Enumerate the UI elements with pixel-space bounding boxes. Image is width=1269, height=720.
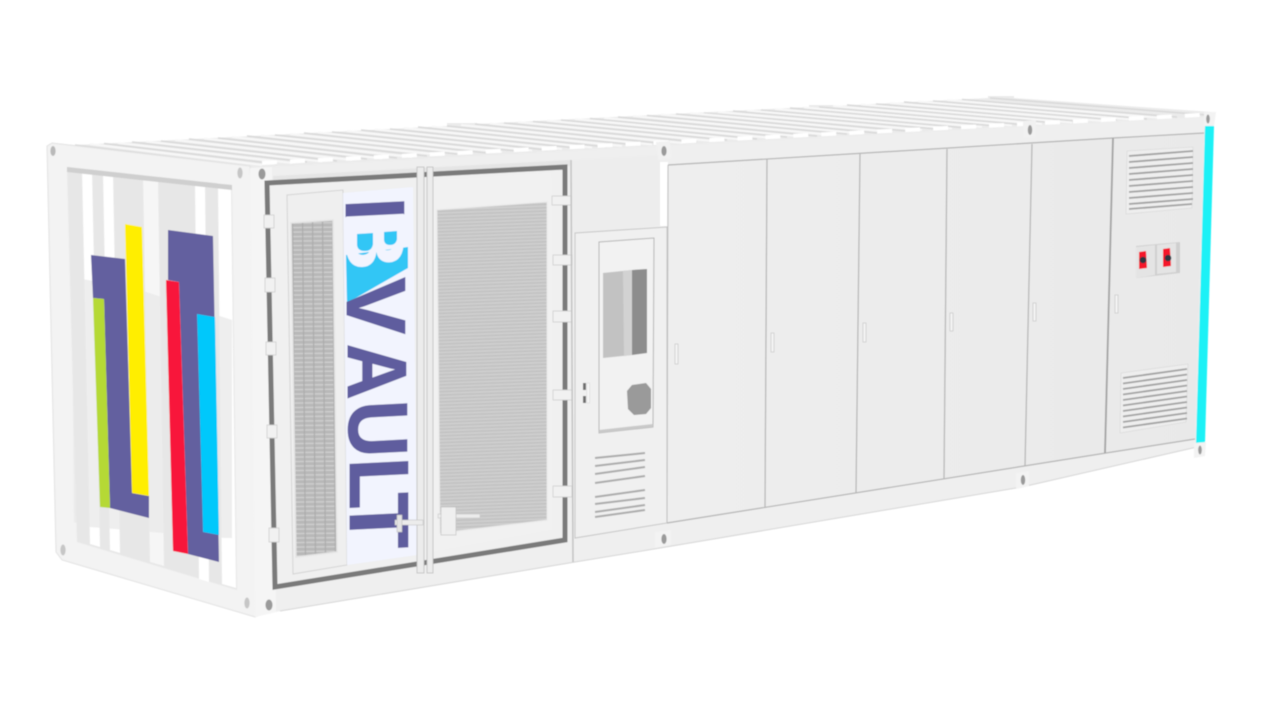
logo wordmark: T — [332, 491, 426, 552]
logo wordmark: U — [331, 398, 425, 460]
door seams — [765, 138, 1113, 508]
logo stripes on end wall — [91, 224, 219, 562]
panel: access door with logo — [264, 167, 572, 587]
logo banner — [328, 187, 426, 565]
vent mesh — [291, 220, 337, 557]
panel: front wall — [250, 117, 1206, 617]
door handles — [675, 295, 1118, 364]
logo wordmark — [328, 195, 426, 552]
panel: end cabinet fittings — [1120, 147, 1193, 433]
B counters — [357, 231, 397, 251]
cabinet vent — [595, 453, 645, 517]
panel: upper service block — [571, 155, 668, 562]
logo wordmark: A — [330, 340, 424, 401]
door handles — [395, 507, 480, 535]
cyan light strip — [1196, 126, 1214, 443]
roof with corrugations — [50, 96, 1212, 172]
corner castings on front wall — [258, 112, 1216, 610]
lower vent — [1120, 364, 1188, 433]
panel: left end face frame — [47, 143, 272, 617]
display window — [603, 269, 647, 358]
display recess — [599, 238, 654, 433]
corrugated end wall — [67, 167, 237, 590]
logo wordmark: I — [328, 195, 422, 223]
logo wordmark: V — [329, 276, 423, 338]
corner castings on end face — [50, 146, 250, 608]
power sockets — [1136, 242, 1180, 278]
louvered window — [437, 202, 547, 533]
right door leaf — [433, 172, 553, 552]
panel: control cabinet door — [575, 227, 667, 538]
octagonal port — [627, 383, 651, 415]
logo wordmark: B — [328, 207, 422, 273]
white ridge highlights along front edge — [262, 115, 1200, 163]
logo wordmark: L — [332, 455, 426, 511]
panel: battery cabinet doors — [667, 133, 1204, 523]
door gasket outline — [267, 167, 565, 587]
hinges — [264, 196, 572, 542]
upper vent — [1126, 147, 1193, 214]
door latch — [583, 383, 590, 403]
door lock rods — [417, 167, 433, 573]
